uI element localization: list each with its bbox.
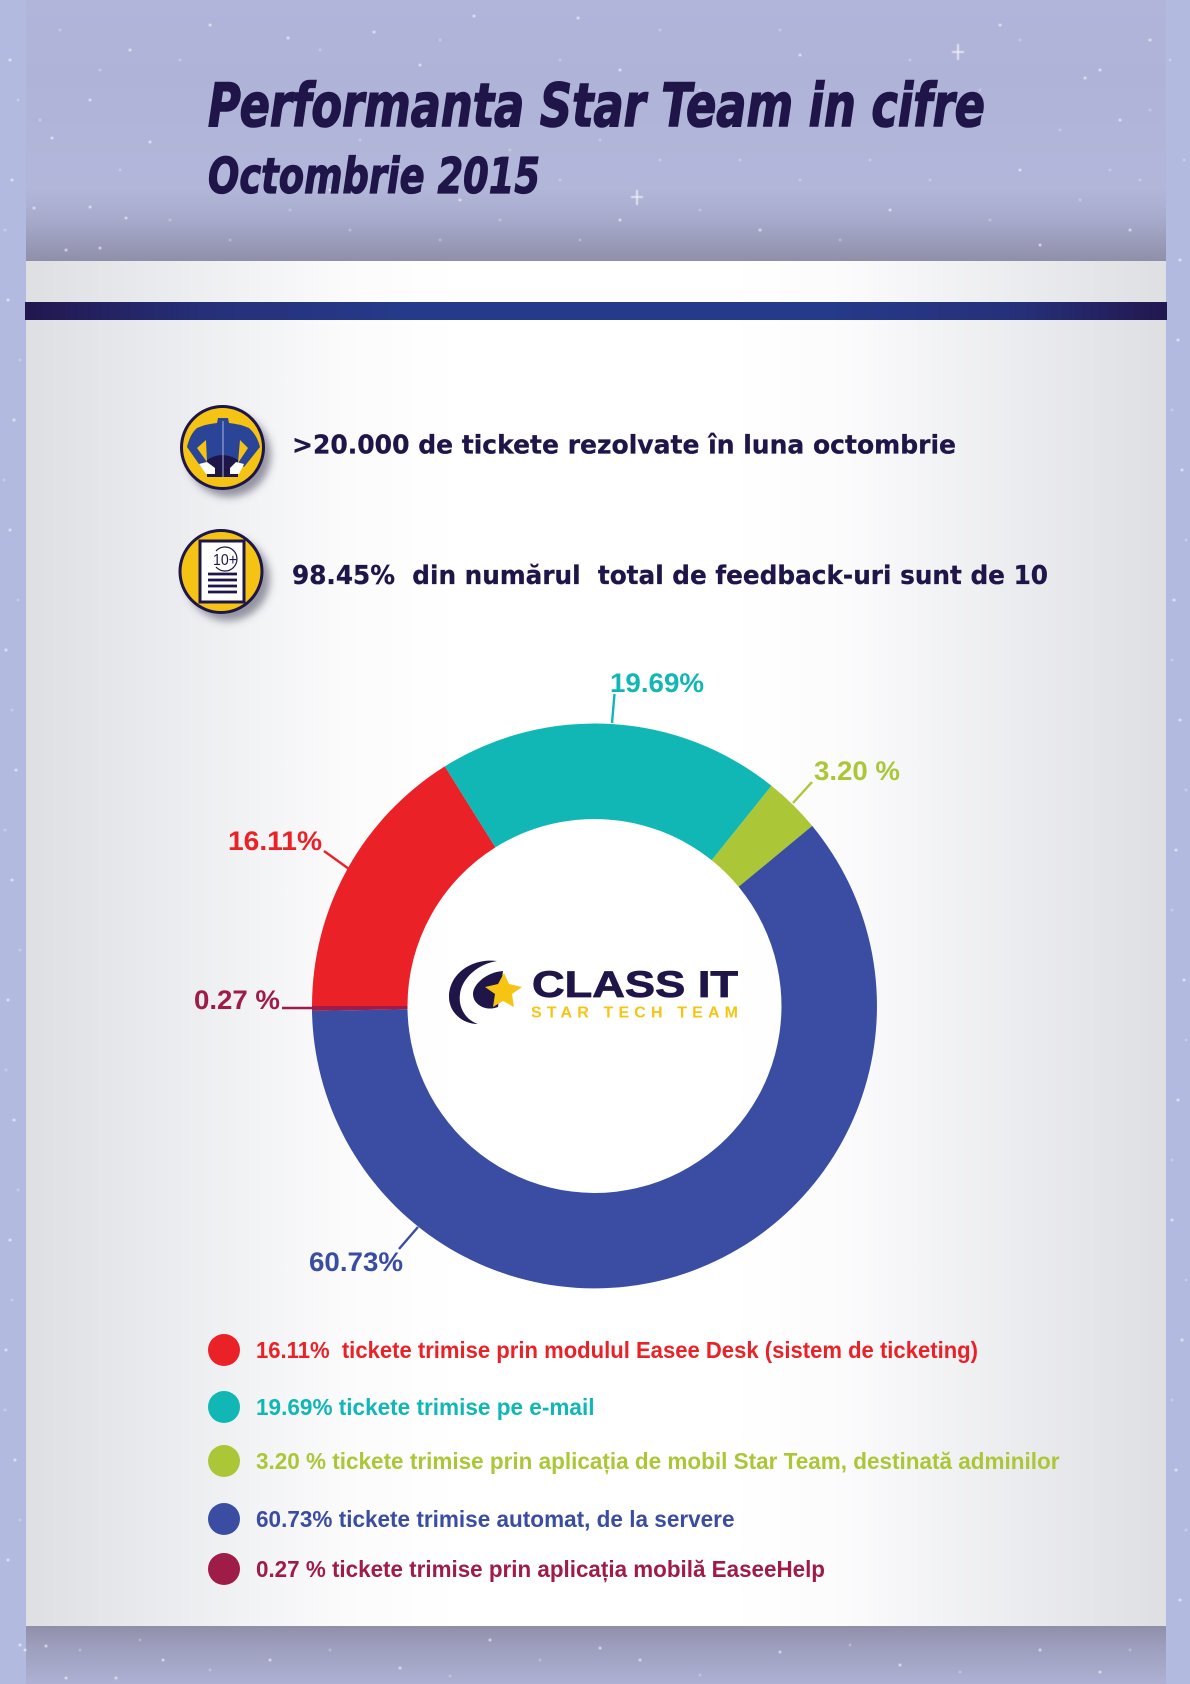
icon: feedback document — [180, 530, 270, 621]
subtitle: Octombrie 2015 — [208, 148, 540, 205]
slice: 19.69% — [445, 723, 772, 860]
slice: 60.73% — [312, 826, 877, 1288]
panel: white content card — [26, 261, 1166, 1626]
legend item: e-mail — [208, 1391, 594, 1423]
chart label: 19.69%: 19.69% — [610, 668, 704, 698]
donut chart — [312, 723, 877, 1288]
stat text: tickets solved: >20.000 de tickete rezolvate în luna octombrie — [292, 430, 956, 460]
logo: Class IT — [449, 961, 738, 1024]
slice: 0.27% — [312, 1006, 408, 1011]
chart label: 60.73%: 60.73% — [309, 1247, 403, 1277]
logo: Class IT: STAR TECH TEAM — [531, 1004, 738, 1022]
chart label: 16.11% — [228, 826, 349, 869]
legend item: servers: 60.73% tickete trimise automat, de la servere — [256, 1506, 734, 1532]
legend item: EaseeHelp: 0.27 % tickete trimise prin aplicația mobilă EaseeHelp — [256, 1556, 825, 1583]
chart label: 16.11%: 16.11% — [228, 826, 322, 856]
chart label: 19.69% — [610, 668, 704, 723]
slice: 3.20% — [712, 786, 812, 887]
legend — [208, 1334, 1060, 1585]
legend item: e-mail: 19.69% tickete trimise pe e-mail — [256, 1394, 594, 1420]
slice: 16.11% — [312, 766, 495, 1006]
chart label: 3.20% — [793, 756, 900, 803]
chart label: 3.20%: 3.20 % — [814, 756, 900, 786]
icon: team member jacket — [182, 406, 271, 497]
header bar — [25, 302, 1167, 320]
legend item: Star Team mobile: 3.20 % tickete trimise prin aplicația de mobil Star Team, destinată adminilor — [256, 1448, 1060, 1475]
stat text: feedback: 98.45% din numărul total de feedback-uri sunt de 10 — [292, 561, 1048, 591]
logo: Class IT: CLASS IT — [532, 964, 738, 1005]
chart label: 60.73% — [309, 1227, 418, 1277]
legend item: Easee Desk: 16.11% tickete trimise prin modulul Easee Desk (sistem de ticketing) — [256, 1337, 978, 1363]
chart label: 0.27%: 0.27 % — [194, 985, 280, 1015]
icon: feedback document: 10+ — [213, 552, 237, 569]
